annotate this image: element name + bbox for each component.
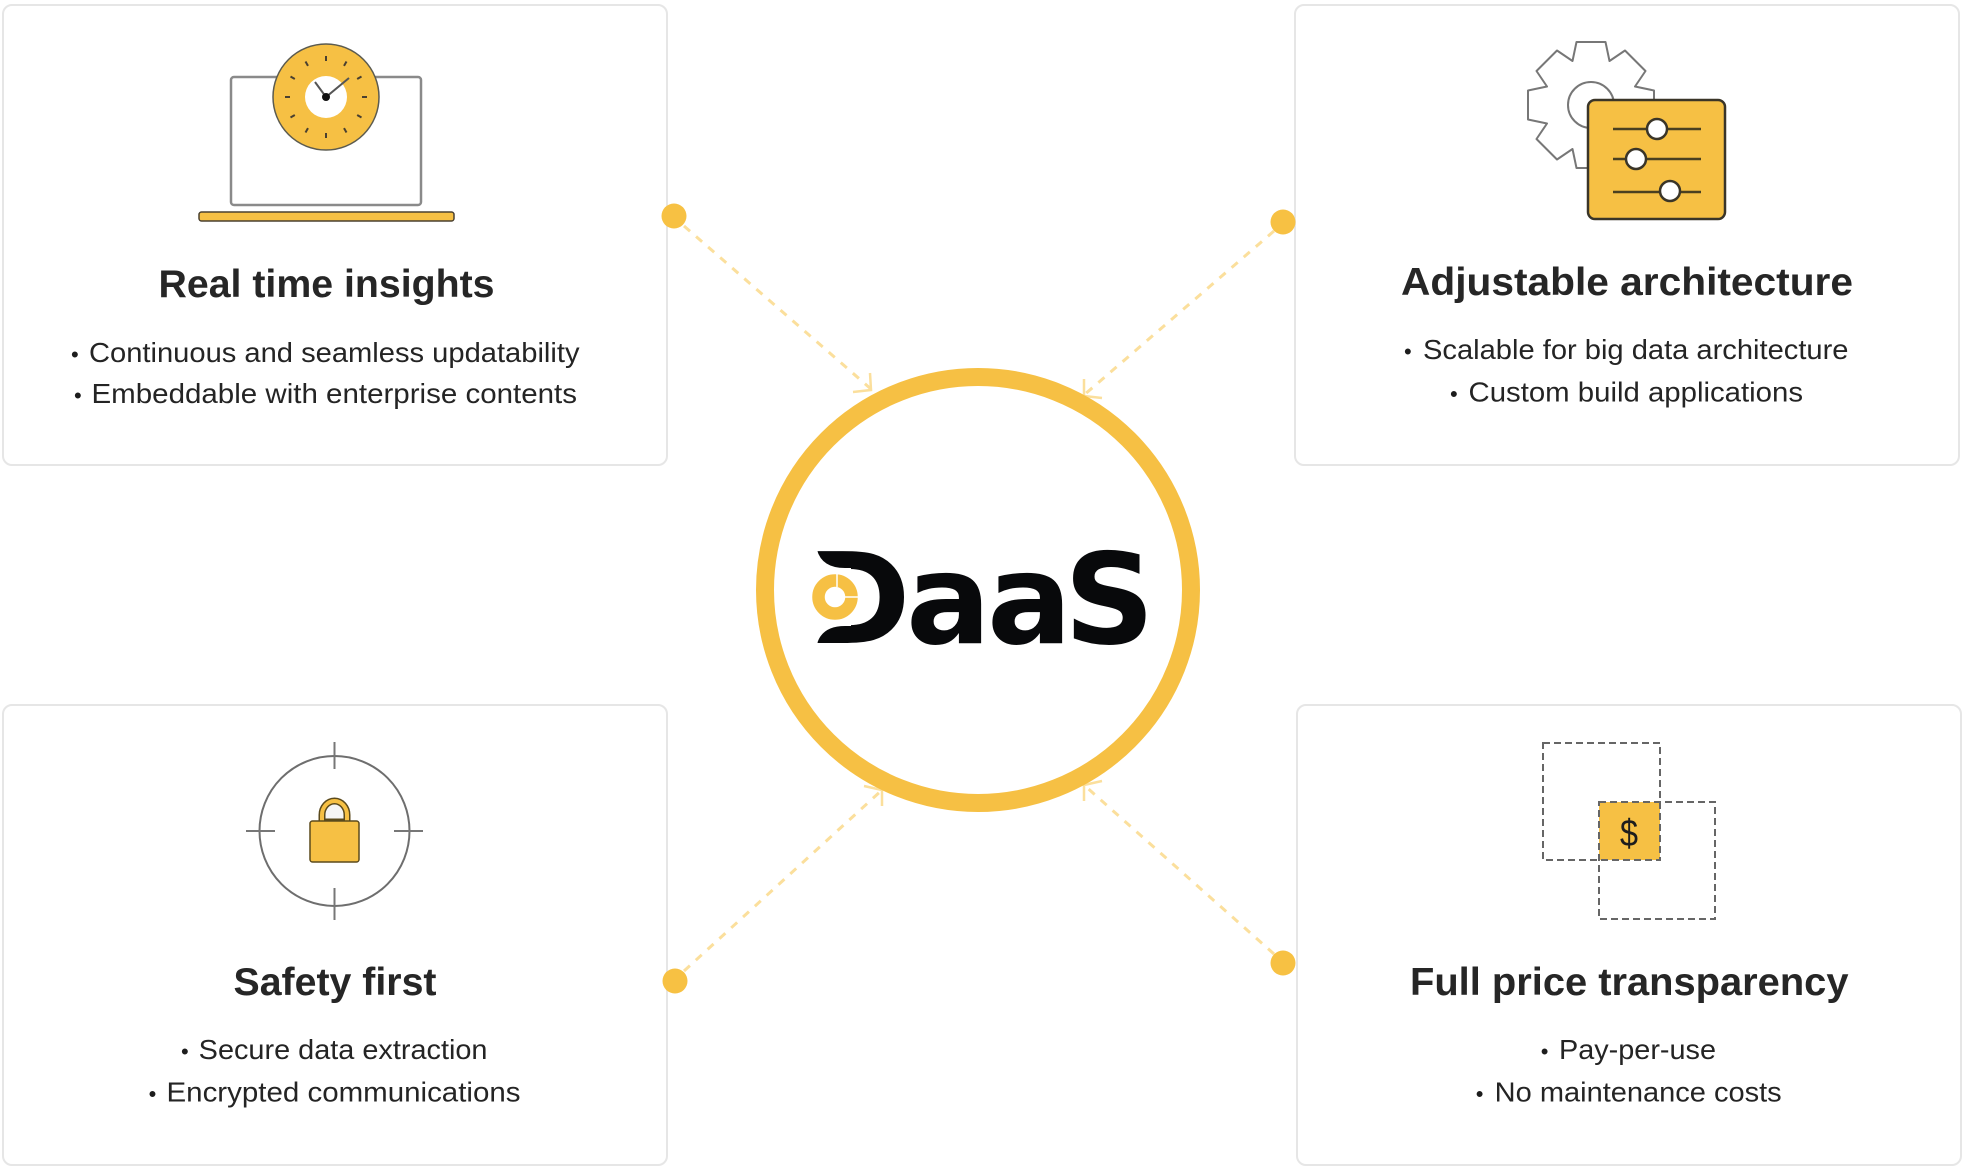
heading: real time insights: Real time insights: [158, 263, 494, 306]
text block: adjustable architecture bullets: •: [1404, 339, 1412, 364]
arrow: adjustable architecture to centre: [1084, 210, 1296, 398]
heading: adjustable architecture: Adjustable architecture: [1401, 261, 1853, 304]
logo wordmark: DaaS: [806, 526, 1155, 673]
text block: adjustable architecture bullets: [1404, 334, 1848, 408]
arrow: safety first to centre: [662, 786, 882, 994]
logo mark: ring: [805, 550, 858, 644]
text block: safety first bullets: •: [181, 1039, 189, 1064]
icon: gear with sliders: [1528, 42, 1725, 219]
text block: adjustable architecture bullets: Scalable for big data architecture: [1423, 334, 1848, 365]
panel: full price transparency: [1297, 705, 1961, 1165]
panel: safety first: [3, 705, 667, 1165]
text block: real time insights bullets: •: [71, 342, 79, 367]
icon: laptop with clock: [199, 44, 454, 221]
text block: adjustable architecture bullets: Custom build applications: [1468, 377, 1803, 408]
text block: full price transparency bullets: •: [1541, 1039, 1548, 1064]
arrow: real time insights to centre: [662, 204, 871, 392]
icon: overlapping dashed squares with dollar: [1543, 743, 1715, 919]
panel: real time insights: [3, 5, 667, 465]
text block: safety first bullets: Encrypted communications: [166, 1077, 520, 1108]
text block: real time insights bullets: [71, 337, 580, 409]
text block: full price transparency bullets: •: [1476, 1082, 1483, 1107]
text block: safety first bullets: Secure data extraction: [199, 1034, 487, 1065]
icon: overlapping dashed squares with dollar: $: [1620, 813, 1638, 855]
centre circle with DaaS logo: [765, 377, 1191, 803]
text block: real time insights bullets: Embeddable with enterprise contents: [92, 378, 577, 409]
text block: full price transparency bullets: [1476, 1034, 1782, 1108]
text block: full price transparency bullets: Pay-per-use: [1559, 1034, 1716, 1065]
text block: safety first bullets: [149, 1034, 520, 1108]
arrow: full price transparency to centre: [1084, 781, 1296, 976]
icon: padlock in crosshair: [246, 742, 423, 920]
text block: safety first bullets: •: [149, 1082, 156, 1107]
heading: safety first: Safety first: [234, 961, 437, 1004]
text block: full price transparency bullets: No maintenance costs: [1495, 1077, 1782, 1108]
heading: full price transparency: Full price transparency: [1410, 961, 1849, 1004]
text block: real time insights bullets: Continuous and seamless updatability: [89, 337, 580, 368]
panel: adjustable architecture: [1295, 5, 1959, 465]
text block: adjustable architecture bullets: •: [1450, 382, 1458, 407]
text block: real time insights bullets: •: [74, 383, 82, 408]
